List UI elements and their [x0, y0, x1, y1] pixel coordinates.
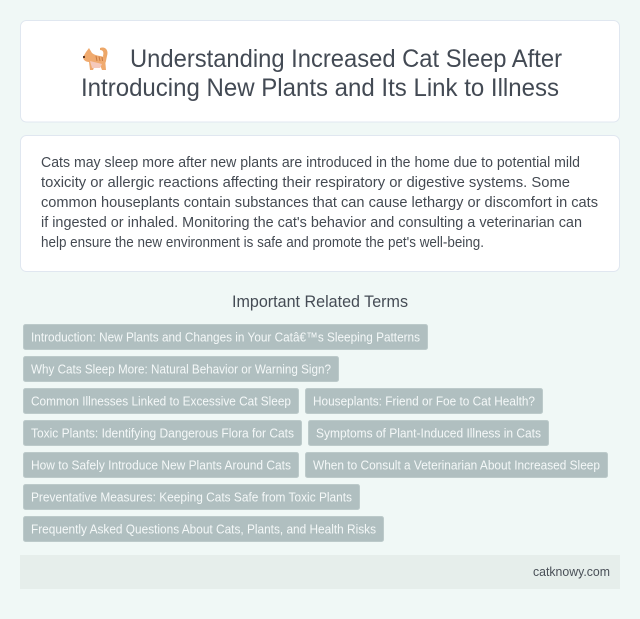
panel: description: [20, 136, 620, 272]
description line 4: if ingested or inhaled. Monitoring the cat's behavior and consulting a veterinarian can: [41, 214, 582, 231]
title line 1: Understanding Increased Cat Sleep After: [130, 45, 562, 73]
tag: why cats sleep more: Why Cats Sleep More: Natural Behavior or Warning Sign?: [31, 362, 331, 376]
tag: when to consult: [306, 452, 608, 478]
tag: common illnesses: Common Illnesses Linked to Excessive Cat Sleep: [31, 394, 291, 408]
tag: symptoms: Symptoms of Plant-Induced Illness in Cats: [316, 426, 541, 440]
footer bar: [20, 555, 620, 589]
heading: related terms: Important Related Terms: [232, 293, 408, 311]
tag: introduction: [24, 324, 428, 350]
tag: preventative measures: [24, 484, 360, 510]
tag: safely introduce: How to Safely Introduce New Plants Around Cats: [31, 458, 291, 472]
panel: related term tags: [24, 324, 608, 542]
panel: title card: [20, 20, 620, 122]
tag: when to consult: When to Consult a Veterinarian About Increased Sleep: [313, 458, 600, 472]
description line 2: toxicity or allergic reactions affecting their respiratory or digestive systems. Some: [41, 174, 570, 191]
description line 5: help ensure the new environment is safe and promote the pet's well-being.: [41, 234, 484, 251]
tag: common illnesses: [24, 388, 298, 414]
description line 1: Cats may sleep more after new plants are introduced in the home due to potential mild: [41, 154, 580, 171]
tag: safely introduce: [24, 452, 298, 478]
tag: faq: Frequently Asked Questions About Cats, Plants, and Health Risks: [31, 522, 376, 536]
tag: toxic plants: [24, 420, 302, 446]
tag: introduction: Introduction: New Plants and Changes in Your Catâ€™s Sleeping Patterns: [31, 330, 420, 344]
tag: houseplants: Houseplants: Friend or Foe to Cat Health?: [313, 394, 535, 408]
tag: toxic plants: Toxic Plants: Identifying Dangerous Flora for Cats: [31, 426, 294, 440]
description line 3: common houseplants contain substances that can cause lethargy or discomfort in cats: [41, 194, 598, 211]
icon: cat: [83, 47, 108, 70]
tag: houseplants: [306, 388, 542, 414]
footer site name: catknowy.com: [533, 564, 610, 579]
tag: faq: [24, 516, 384, 542]
tag: preventative measures: Preventative Measures: Keeping Cats Safe from Toxic Plants: [31, 490, 352, 504]
tag: why cats sleep more: [24, 356, 338, 382]
title line 2: Introducing New Plants and Its Link to Illness: [81, 74, 559, 102]
tag: symptoms: [308, 420, 548, 446]
